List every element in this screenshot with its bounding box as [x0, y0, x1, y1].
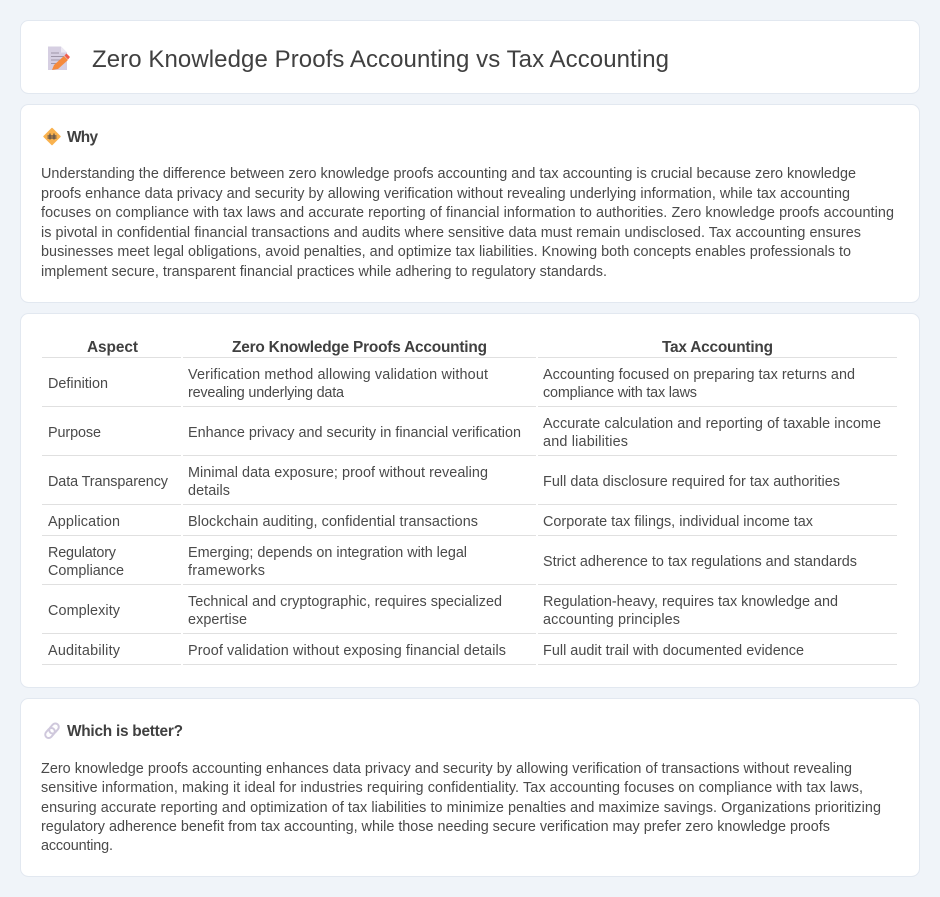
table header row: Aspect: [87, 339, 138, 356]
row: regulatory compliance: [42, 545, 897, 585]
row: auditability: Proof validation without exposing financial details: [188, 643, 506, 659]
text block: why paragraph: proofs enhance data privacy and security by allowing verification without revealing underlying information, while tax accounting: [41, 186, 850, 202]
row: complexity: [42, 594, 897, 634]
text block: why paragraph: businesses meet legal obligations, avoid penalties, and optimize tax liabilities. Knowing both concepts enables professionals to: [41, 244, 851, 260]
row: data transparency: Data Transparency: [48, 474, 169, 490]
row: complexity: Complexity: [48, 603, 121, 619]
table header row: [42, 339, 897, 358]
panel: which is better: [20, 698, 920, 876]
icon: document with pencil: [48, 46, 70, 70]
row: regulatory compliance: frameworks: [188, 563, 265, 579]
row: data transparency: [42, 465, 897, 505]
title: Zero Knowledge Proofs Accounting vs Tax Accounting: [92, 46, 669, 73]
row: auditability: Full audit trail with documented evidence: [543, 643, 804, 659]
text block: why paragraph: is pivotal in confidential financial transactions and audits where sensitive data must remain undisclosed. Tax accounting ensures: [41, 225, 861, 241]
row: purpose: and liabilities: [543, 434, 628, 450]
row: complexity: expertise: [188, 612, 247, 628]
text block: which paragraph: Zero knowledge proofs accounting enhances data privacy and security by allowing verification of transactions without revealing: [41, 761, 852, 777]
row: definition: Accounting focused on preparing tax returns and: [543, 367, 855, 383]
row: definition: Definition: [48, 376, 108, 392]
text block: why paragraph: implement secure, transparent financial practices while adhering to regulatory standards.: [41, 264, 607, 280]
row: complexity: Technical and cryptographic, requires specialized: [188, 594, 502, 610]
row: purpose: Purpose: [48, 425, 101, 441]
row: data transparency: Minimal data exposure; proof without revealing: [188, 465, 488, 481]
text block: which paragraph: regulatory adherence benefit from tax accounting, while those needing secure verification may prefer zero knowledge proofs: [41, 819, 830, 835]
row: auditability: Auditability: [48, 643, 121, 659]
row: purpose: Enhance privacy and security in financial verification: [188, 425, 521, 441]
panel: comparison table: [20, 314, 920, 688]
text block: why paragraph: Understanding the difference between zero knowledge proofs accounting and tax accounting is crucial because zero knowledge: [41, 166, 856, 182]
text block: why paragraph: [41, 166, 894, 280]
panel: title header: [20, 20, 920, 94]
table header row: Zero Knowledge Proofs Accounting: [232, 339, 487, 356]
row: application: Application: [48, 514, 120, 530]
row: complexity: accounting principles: [543, 612, 680, 628]
row: data transparency: details: [188, 483, 230, 499]
row: regulatory compliance: Emerging; depends on integration with legal: [188, 545, 467, 561]
row: data transparency: Full data disclosure required for tax authorities: [543, 474, 840, 490]
row: application: Corporate tax filings, individual income tax: [543, 514, 814, 530]
table header row: Tax Accounting: [662, 339, 773, 356]
row: definition: compliance with tax laws: [543, 385, 697, 401]
row: definition: revealing underlying data: [188, 385, 344, 401]
row: application: Blockchain auditing, confidential transactions: [188, 514, 478, 530]
row: definition: Verification method allowing validation without: [188, 367, 488, 383]
row: definition: [42, 367, 897, 407]
heading: which is better: Which is better?: [67, 723, 183, 740]
row: regulatory compliance: Compliance: [48, 563, 124, 579]
row: application: [42, 514, 897, 536]
row: auditability: [42, 643, 897, 665]
text block: which paragraph: ensuring accurate reporting and optimization of tax liabilities to minimize penalties and maximize savings. Organizations prioritizing: [41, 800, 881, 816]
heading: why: Why: [67, 129, 98, 146]
text block: why paragraph: focuses on compliance with tax laws and accurate reporting of financial information to authorities. Zero knowledge proofs accounting: [41, 205, 894, 221]
text block: which paragraph: accounting.: [41, 838, 113, 854]
row: regulatory compliance: Regulatory: [48, 545, 117, 561]
text block: which paragraph: [41, 761, 881, 854]
text block: which paragraph: sensitive information, making it ideal for industries requiring confidentiality. Tax accounting focuses on compliance with tax laws,: [41, 780, 863, 796]
row: regulatory compliance: Strict adherence to tax regulations and standards: [543, 554, 857, 570]
panel: why: [20, 104, 920, 302]
row: purpose: Accurate calculation and reporting of taxable income: [543, 416, 881, 432]
row: complexity: Regulation-heavy, requires tax knowledge and: [543, 594, 838, 610]
icon: link: [44, 722, 60, 739]
row: purpose: [42, 416, 897, 456]
icon: diamond sign: [44, 128, 60, 144]
